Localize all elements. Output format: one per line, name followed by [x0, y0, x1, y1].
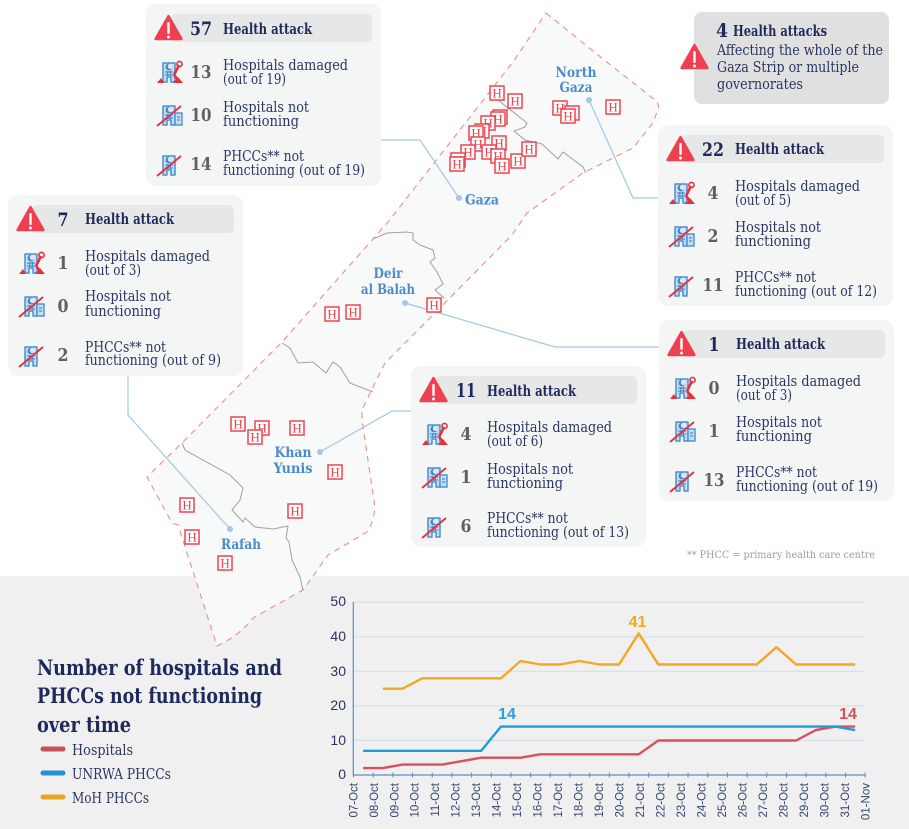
hospital markers: Rafah: H [187, 530, 197, 544]
panel: North Gaza [658, 125, 893, 306]
panel: Khan Yunis: 1 [460, 467, 472, 488]
x-axis date labels: 11-Oct [430, 782, 442, 817]
y-axis labels: 0 [338, 766, 346, 782]
panel: Gaza: 13 [190, 62, 212, 83]
line chart [330, 593, 872, 820]
panel: whole-of-Gaza attacks: 4 [716, 20, 728, 42]
panel: Gaza: functioning (out of 19) [223, 163, 365, 179]
y-axis labels: 10 [330, 732, 346, 748]
hospital markers: Gaza: H [452, 156, 462, 172]
panel: North Gaza: Health attack [735, 141, 825, 158]
panel: Rafah: 7 [58, 209, 68, 231]
panel: North Gaza: 4 [708, 183, 718, 204]
hospital markers: Gaza: H [524, 142, 534, 156]
panel: Rafah: PHCCs** not [85, 340, 166, 356]
x-axis date labels [348, 782, 872, 820]
hospital markers: Gaza: H [477, 124, 487, 138]
hospital markers: Khan Yunis: H [233, 416, 243, 432]
hospital markers: Gaza: H [473, 136, 483, 152]
hospital markers: Gaza: H [483, 116, 493, 130]
hospital markers: Gaza: H [513, 154, 523, 168]
chart background panel [0, 576, 909, 829]
hospital markers: Gaza: H [463, 144, 473, 160]
hospital markers: Gaza: H [492, 86, 502, 100]
panel: Rafah: functioning (out of 9) [85, 353, 221, 369]
panel: Rafah: 1 [58, 253, 68, 274]
legend: UNRWA PHCCs [72, 767, 171, 783]
panel: Khan Yunis: 11 [456, 380, 476, 402]
hospital markers: Rafah: H [220, 556, 230, 570]
data label: Hospitals 14: 14 [839, 706, 857, 723]
hospital markers: Deir al Balah [325, 298, 441, 322]
hospital markers: Gaza: H [510, 94, 520, 108]
x-axis date labels: 22-Oct [656, 782, 668, 818]
x-axis date labels: 07-Oct [348, 782, 360, 818]
x-axis date labels: 25-Oct [717, 782, 729, 818]
x-axis date labels: 08-Oct [369, 782, 381, 818]
panel: North Gaza: 22 [702, 139, 724, 161]
panel: North Gaza: PHCCs** not [735, 270, 816, 286]
panel: Deir al Balah [659, 320, 894, 501]
panel: North Gaza: 11 [702, 275, 724, 296]
x-axis date labels: 26-Oct [737, 782, 749, 818]
panel: Khan Yunis: Hospitals damaged [487, 420, 612, 436]
panel: Gaza: Health attack [223, 21, 313, 38]
panel: Rafah: Hospitals damaged [85, 249, 210, 265]
panel: Deir al Balah: Health attack [736, 336, 826, 353]
panel: Gaza: 14 [190, 154, 212, 175]
data label: MoH 41: 41 [629, 614, 646, 631]
panel: Deir al Balah: 1 [708, 334, 720, 356]
label: Gaza: Gaza [465, 192, 499, 208]
panel: whole-of-Gaza attacks: Health attacks [733, 23, 827, 40]
map of the Gaza Strip [147, 13, 659, 646]
x-axis date labels: 01-Nov [860, 783, 872, 820]
panel: Deir al Balah: Hospitals not [736, 415, 822, 431]
x-axis date labels: 31-Oct [840, 782, 852, 818]
x-axis date labels: 30-Oct [819, 782, 831, 818]
hospital markers: Gaza: H [497, 158, 507, 174]
chart title: PHCCs not functioning [37, 683, 262, 708]
panel: North Gaza: functioning [735, 234, 811, 250]
hospital markers: Deir al Balah: H [327, 306, 337, 322]
panel: whole-of-Gaza attacks [682, 12, 889, 104]
panel: North Gaza: 2 [708, 226, 718, 247]
panel: Gaza: 57 [190, 18, 212, 40]
hospital markers: Rafah: H [182, 498, 192, 512]
label: Khan Yunis: Khan [274, 445, 312, 461]
y-axis labels [330, 593, 346, 782]
panel: Khan Yunis: functioning (out of 13) [487, 525, 629, 541]
hospital markers: Khan Yunis: H [292, 420, 302, 436]
x-axis date labels: 20-Oct [614, 782, 626, 818]
hospital markers: Khan Yunis: H [290, 504, 300, 518]
panel: Khan Yunis: Health attack [487, 383, 577, 400]
x-axis date labels: 21-Oct [635, 782, 647, 818]
panel: Rafah [8, 195, 243, 376]
label: Khan Yunis: Yunis [273, 461, 313, 477]
panel: whole-of-Gaza attacks: Affecting the whole of the [716, 43, 883, 59]
legend: MoH PHCCs [72, 791, 149, 807]
x-axis date labels: 29-Oct [799, 782, 811, 818]
connector lines with location dots [128, 97, 660, 532]
panel: Rafah: Health attack [85, 211, 175, 228]
x-axis date labels: 23-Oct [676, 782, 688, 818]
x-axis date labels: 09-Oct [389, 782, 401, 818]
label: North Gaza: North [556, 65, 596, 81]
panel: Deir al Balah: Hospitals damaged [736, 374, 861, 390]
x-axis date labels: 16-Oct [533, 782, 545, 818]
panel: North Gaza: Hospitals damaged [735, 179, 860, 195]
y-axis labels: 50 [330, 593, 346, 609]
x-axis date labels: 13-Oct [471, 782, 483, 818]
panel: Rafah: functioning [85, 304, 161, 320]
panel: Gaza: (out of 19) [223, 72, 286, 88]
panel: Khan Yunis: 6 [460, 516, 472, 537]
panel: Rafah: 2 [58, 345, 68, 366]
hospital markers: Gaza: H [493, 148, 503, 164]
panel: whole-of-Gaza attacks: governorates [717, 77, 803, 93]
panel: Deir al Balah: 0 [708, 378, 720, 399]
series: MoH PHCCs [383, 633, 855, 689]
hospital markers: North Gaza [553, 100, 620, 124]
x-axis date labels: 17-Oct [553, 782, 565, 818]
y-axis labels: 20 [330, 697, 346, 713]
hospital markers: North Gaza: H [563, 108, 573, 124]
panel: North Gaza: Hospitals not [735, 220, 821, 236]
panel: Khan Yunis: 4 [460, 424, 472, 445]
panel: Gaza: Hospitals damaged [223, 58, 348, 74]
hospital markers: Deir al Balah: H [348, 304, 358, 320]
hospital markers: Khan Yunis: H [257, 420, 267, 436]
panel: Gaza: PHCCs** not [223, 149, 304, 165]
hospital markers: North Gaza: H [608, 100, 618, 114]
x-axis date labels: 10-Oct [410, 782, 422, 818]
hospital markers: Gaza: H [484, 144, 494, 160]
x-axis date labels: 19-Oct [594, 782, 606, 818]
panel: North Gaza: functioning (out of 12) [735, 284, 877, 300]
panel: Khan Yunis: (out of 6) [487, 434, 543, 450]
hospital markers: Gaza: H [453, 152, 463, 168]
footnote: ** PHCC = primary health care centre [687, 549, 875, 561]
y-axis labels: 40 [330, 628, 346, 644]
x-axis date labels: 24-Oct [696, 782, 708, 818]
label: Deir al Balah: Deir [374, 266, 403, 282]
data label: UNRWA 14: 14 [498, 706, 516, 723]
hospital markers: Gaza: H [494, 136, 504, 150]
panel: Deir al Balah: (out of 3) [736, 388, 792, 404]
panel: Deir al Balah: functioning [736, 429, 812, 445]
hospital markers: North Gaza: H [567, 106, 577, 120]
label: North Gaza: Gaza [560, 80, 592, 96]
label: Rafah: Rafah [221, 537, 261, 553]
y-axis labels: 30 [330, 663, 346, 679]
panel: Khan Yunis [411, 366, 646, 547]
legend: Hospitals [72, 743, 133, 759]
hospital markers: Rafah [180, 498, 232, 570]
hospital markers: Khan Yunis [231, 416, 342, 518]
panel: Gaza: 10 [190, 105, 212, 126]
hospital markers: Gaza: H [471, 126, 481, 140]
hospital markers: Gaza: H [493, 112, 503, 126]
panel: Rafah: Hospitals not [85, 289, 171, 305]
panel: North Gaza: (out of 5) [735, 193, 791, 209]
panel: Khan Yunis: PHCCs** not [487, 511, 568, 527]
panel: Rafah: 0 [58, 296, 68, 317]
x-axis date labels: 18-Oct [574, 782, 586, 818]
x-axis date labels: 28-Oct [778, 782, 790, 818]
panel: Deir al Balah: 1 [708, 421, 720, 442]
panel: Deir al Balah: 13 [704, 470, 724, 491]
panel: Rafah: (out of 3) [85, 263, 141, 279]
label: Deir al Balah: al Balah [361, 282, 415, 298]
series: UNRWA PHCCs [363, 727, 855, 751]
hospital markers: Khan Yunis: H [250, 430, 260, 444]
legend [43, 743, 171, 807]
panel: Deir al Balah: functioning (out of 19) [736, 479, 878, 495]
hospital markers: Khan Yunis: H [330, 464, 340, 480]
panel: Khan Yunis: Hospitals not [487, 462, 573, 478]
panel: Khan Yunis: functioning [487, 476, 563, 492]
x-axis date labels: 27-Oct [758, 782, 770, 818]
panel: Deir al Balah: PHCCs** not [736, 465, 817, 481]
panel: Gaza: Hospitals not [223, 100, 309, 116]
hospital markers: Gaza [450, 86, 536, 174]
hospital markers: Deir al Balah: H [429, 298, 439, 312]
x-axis date labels: 14-Oct [492, 782, 504, 818]
chart title: Number of hospitals and [37, 655, 282, 680]
panel: Gaza: functioning [223, 114, 299, 130]
x-axis date labels: 12-Oct [451, 782, 463, 818]
panel: whole-of-Gaza attacks: Gaza Strip or multiple [717, 60, 859, 76]
panel: Gaza [146, 4, 381, 186]
chart title: over time [37, 712, 131, 737]
hospital markers: Gaza: H [495, 110, 505, 124]
hospital markers: North Gaza: H [555, 100, 565, 116]
series: Hospitals [363, 727, 855, 768]
x-axis date labels: 15-Oct [512, 782, 524, 818]
